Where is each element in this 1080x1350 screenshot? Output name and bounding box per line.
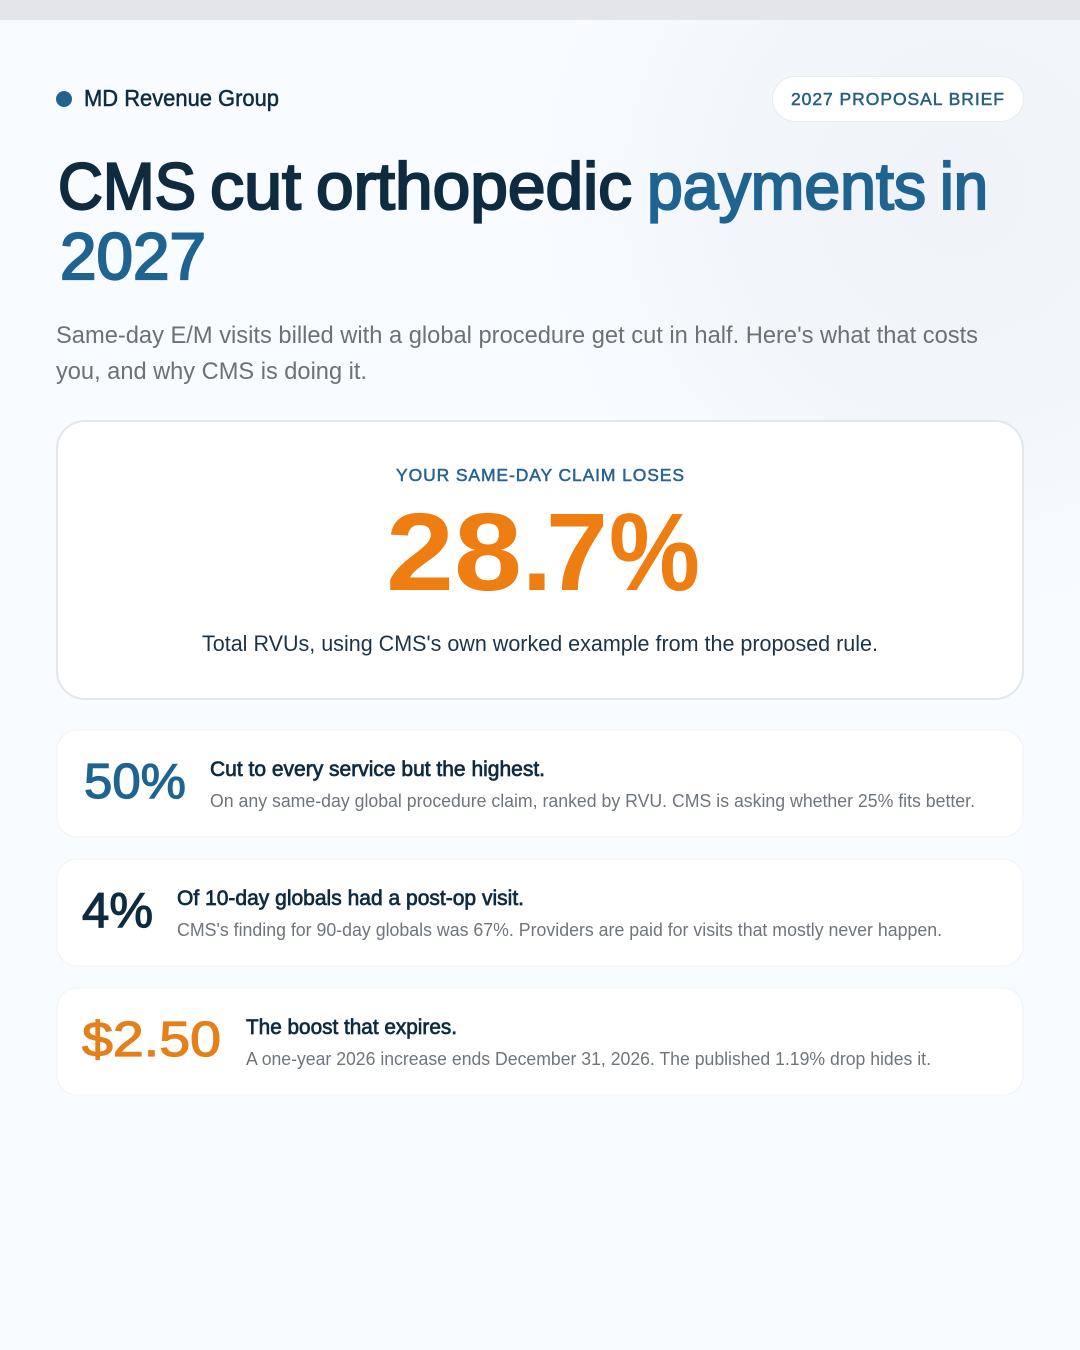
panel: $2.50 stat — [57, 988, 1023, 1095]
panel: hero stat — [57, 421, 1023, 699]
stat number: $2.50 — [82, 1013, 221, 1067]
stat heading: Of 10-day globals had a post-op visit. — [177, 887, 524, 910]
subtitle — [56, 322, 978, 385]
title: 2027 — [60, 219, 206, 293]
hero label: YOUR SAME-DAY CLAIM LOSES — [396, 465, 684, 485]
icon: brand dot — [56, 91, 72, 107]
hero number — [386, 491, 700, 614]
title: cut — [210, 149, 301, 223]
stat heading: The boost that expires. — [246, 1016, 457, 1039]
stat description: On any same-day global procedure claim, ranked by RVU. CMS is asking whether 25% fits better. — [210, 791, 975, 811]
panel: 50% stat — [57, 730, 1023, 837]
header: brand — [56, 85, 279, 111]
title: payments — [647, 149, 926, 223]
stat number: 50% — [84, 755, 186, 809]
panel: 4% stat — [57, 859, 1023, 966]
title: in — [940, 149, 988, 223]
hero number: . — [522, 491, 552, 614]
hero number: 7 — [546, 491, 608, 614]
hero number: 28 — [386, 491, 522, 614]
stat number: 4% — [82, 884, 153, 938]
hero number: % — [609, 491, 700, 614]
badge: 2027 proposal brief: 2027 PROPOSAL BRIEF — [791, 89, 1004, 109]
hero description: Total RVUs, using CMS's own worked example from the proposed rule. — [202, 631, 878, 656]
brand name: MD Revenue Group — [84, 85, 279, 111]
stat heading: Cut to every service but the highest. — [210, 758, 545, 781]
title — [58, 149, 988, 293]
badge: 2027 proposal brief — [772, 76, 1024, 122]
title: orthopedic — [316, 149, 632, 223]
subtitle: you, and why CMS is doing it. — [56, 358, 367, 385]
stat description: A one-year 2026 increase ends December 31, 2026. The published 1.19% drop hides it. — [246, 1049, 931, 1069]
title: CMS — [58, 149, 196, 223]
stat description: CMS's finding for 90-day globals was 67%. Providers are paid for visits that mostly never happen. — [177, 920, 942, 940]
subtitle: Same-day E/M visits billed with a global procedure get cut in half. Here's what that costs — [56, 322, 978, 349]
